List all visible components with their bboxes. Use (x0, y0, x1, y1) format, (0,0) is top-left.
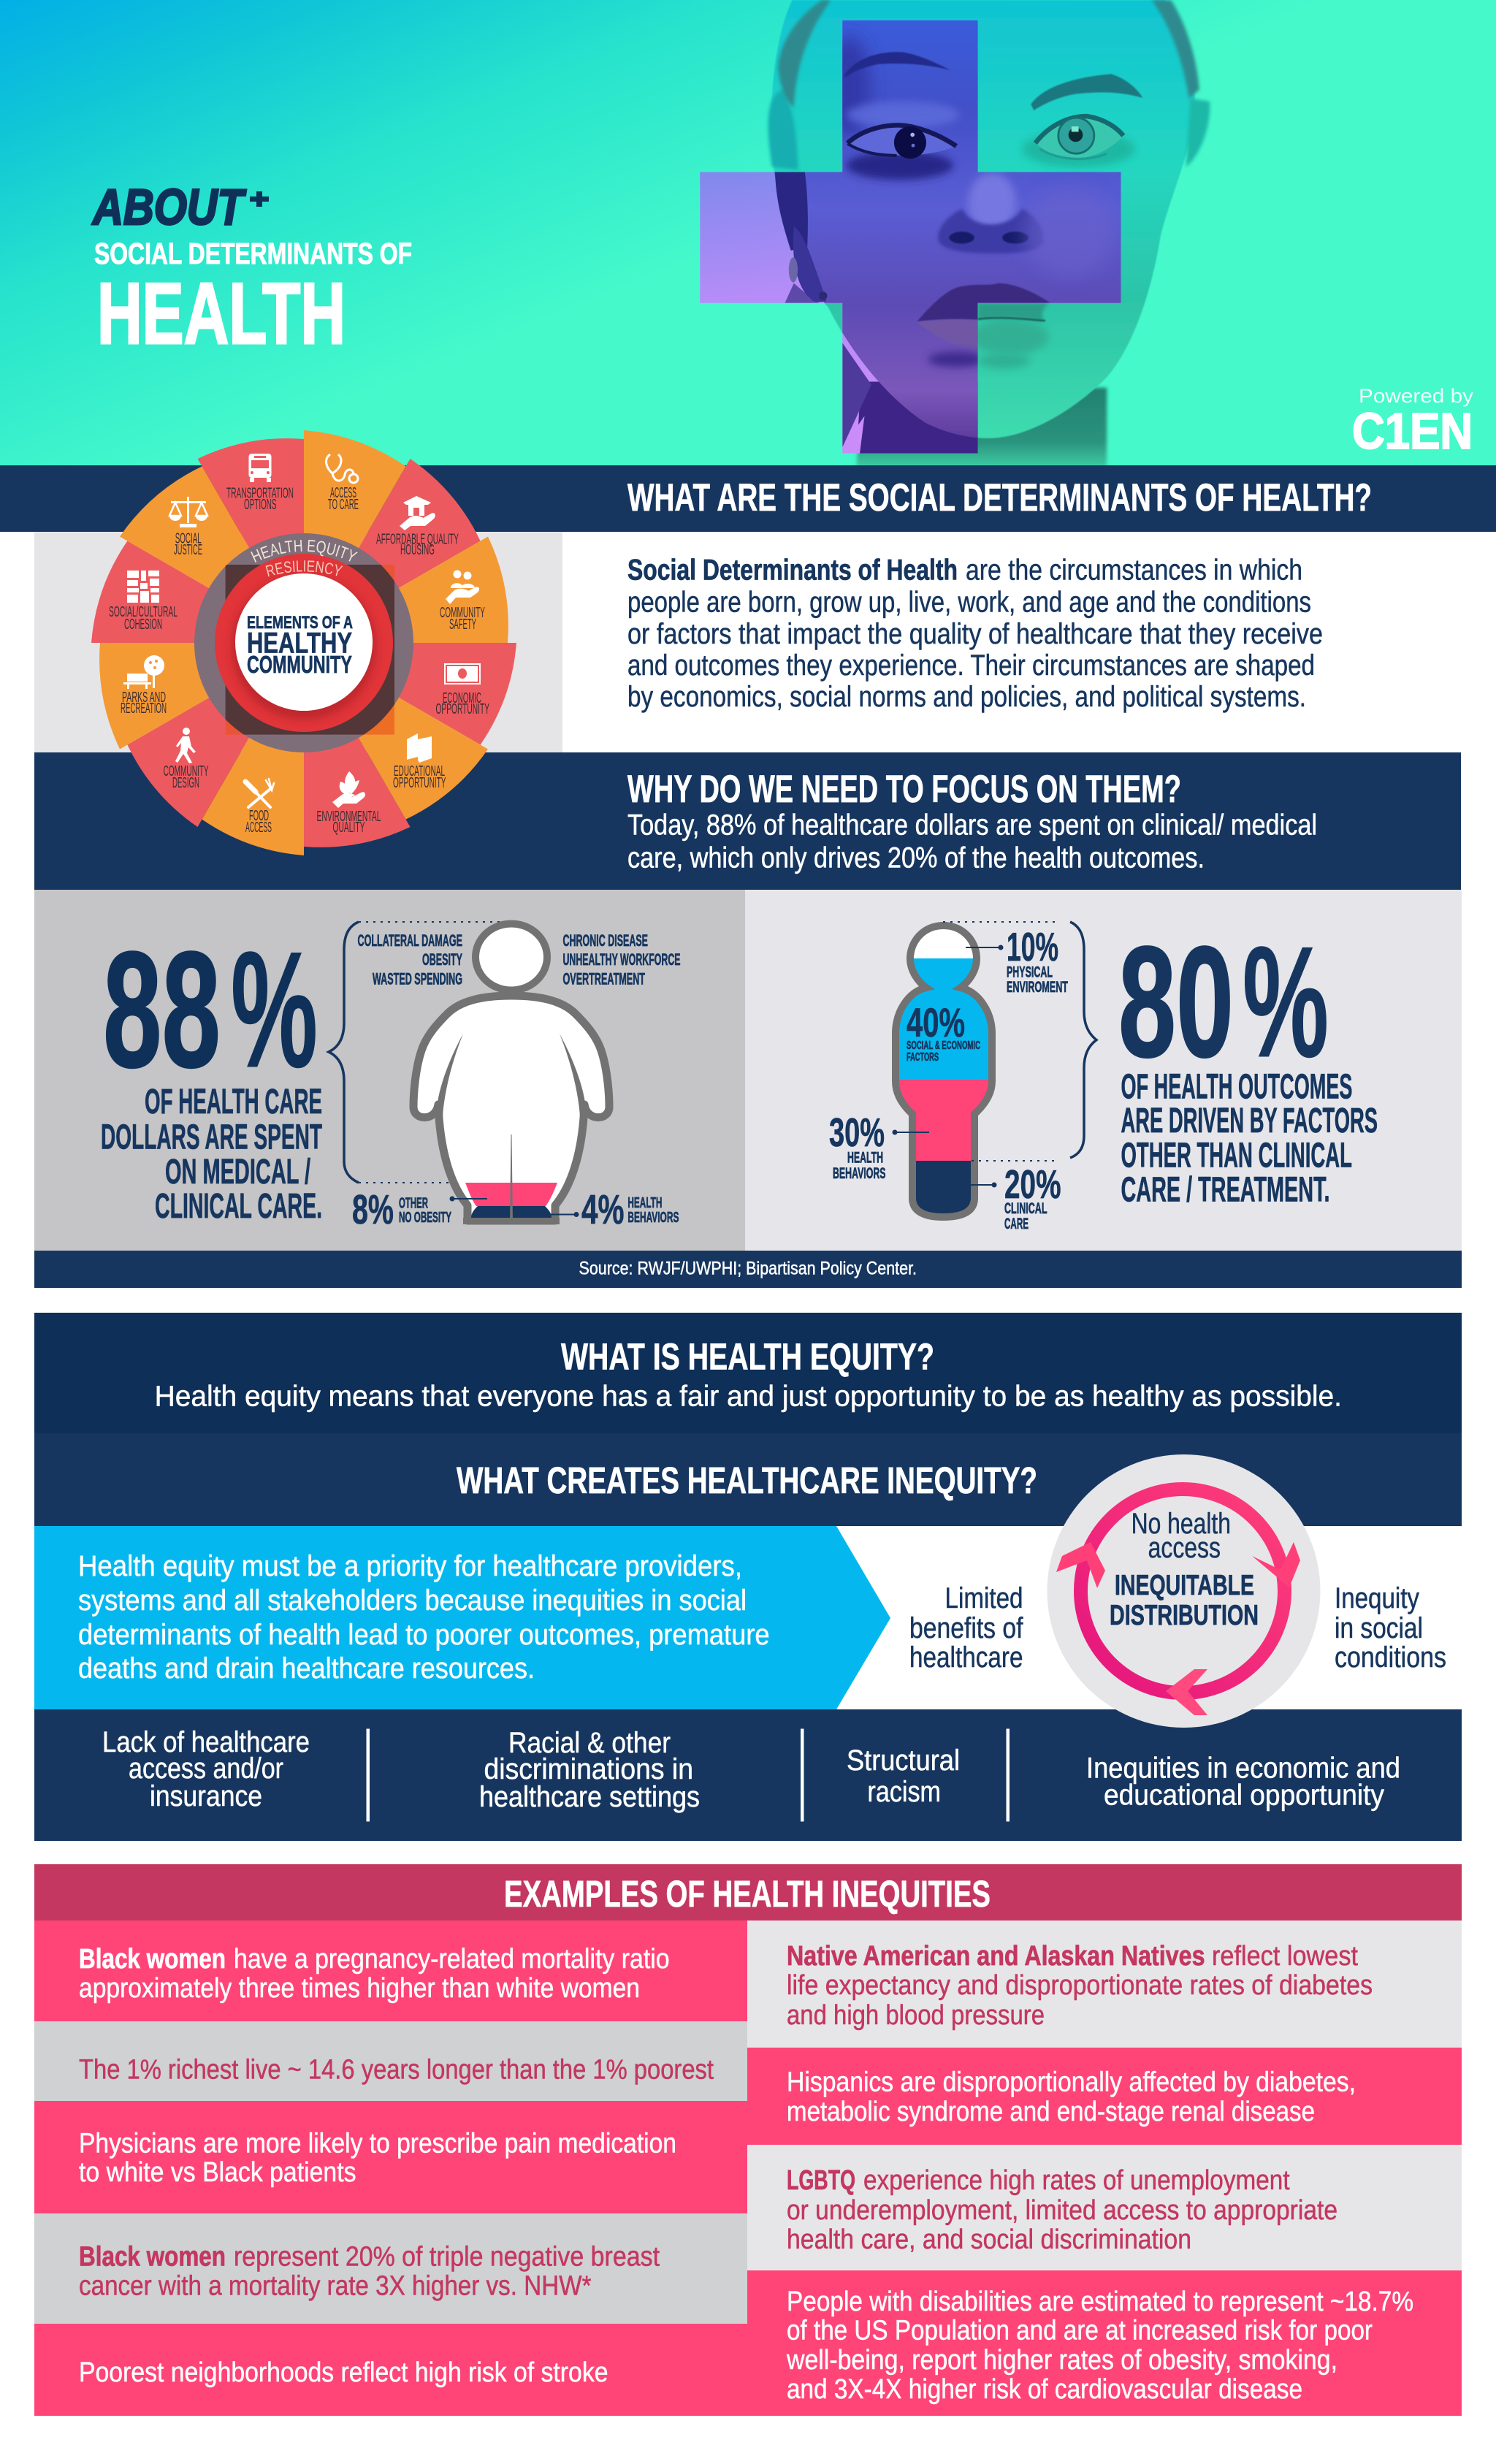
label: educational opportunity (393, 763, 446, 791)
example: hispanics: metabolic syndrome and end-stage renal disease (787, 2097, 1315, 2127)
center square overlay (226, 565, 394, 735)
example: lgbtq: LGBTQ (787, 2165, 855, 2196)
center disc shadow (232, 575, 376, 720)
label: limited benefits (909, 1582, 1023, 1674)
icon: people grid (127, 571, 159, 603)
example: breast cancer (34, 2213, 747, 2324)
stat: 20 percent clinical care: 20% (1004, 1162, 1061, 1207)
labels: costs right (562, 931, 681, 988)
stat: 40 percent social and economic: SOCIAL & ECONOMIC (907, 1040, 980, 1052)
text block: Health equity must be a priority for healthcare providers, (78, 1550, 742, 1582)
cause: discrimination: discriminations in (484, 1753, 693, 1785)
text: inequitable distribution (1110, 1570, 1259, 1631)
cause: structural racism (847, 1744, 960, 1808)
example: pain medication (34, 2101, 747, 2213)
example: lgbtq: or underemployment, limited access to appropriate (787, 2195, 1337, 2226)
label: food access (245, 808, 272, 836)
example: life expectancy (34, 2021, 747, 2101)
label: environmental quality: ENVIRONMENTAL (317, 809, 381, 825)
section band: what are the social determinants (0, 465, 1496, 532)
icon: books (407, 733, 432, 763)
arrow: top right (1252, 1542, 1300, 1587)
example: life expectancy: The 1% richest live ~ 14.6 years longer than the 1% poorest (79, 2054, 714, 2085)
example: pregnancy mortality (34, 1921, 747, 2021)
label: transportation options (226, 485, 294, 513)
text: inequitable distribution: DISTRIBUTION (1110, 1600, 1259, 1631)
label: transportation options: TRANSPORTATION (226, 485, 294, 501)
stat: 10 percent physical environment: PHYSICAL (1007, 964, 1053, 980)
text: no health access: No health (1131, 1508, 1231, 1540)
panel: why focus (34, 752, 1461, 890)
example: hispanics (747, 2048, 1462, 2145)
stat: 80 percent: 80 (1118, 913, 1234, 1090)
text block: 88 percent description (101, 1083, 322, 1226)
text block: definition: people are born, grow up, live, work, and age and the conditions (627, 587, 1311, 619)
stat: 30 percent health behaviors: HEALTH (847, 1149, 883, 1166)
label: social cultural cohesion: SOCIAL/CULTURAL (109, 604, 178, 620)
cause: economic and educational (1086, 1752, 1400, 1812)
stat: 40 percent social and economic (907, 999, 980, 1064)
center text (247, 613, 353, 678)
label: community design: COMMUNITY (164, 763, 209, 779)
example: lgbtq (747, 2145, 1462, 2270)
labels: costs left: COLLATERAL DAMAGE (358, 931, 462, 950)
example: disabilities: of the US Population and are at increased risk for poor (787, 2316, 1373, 2346)
example: stroke (34, 2324, 747, 2416)
ring (1081, 1489, 1284, 1693)
text block (78, 1550, 770, 1685)
label: food access: FOOD (249, 808, 269, 824)
label: affordable quality housing (376, 532, 459, 558)
example: disabilities: and 3X-4X higher risk of cardiovascular disease (787, 2374, 1302, 2405)
example: native americans: life expectancy and disproportionate rates of diabetes (787, 1970, 1373, 2001)
stat: 8 percent other: OTHER (399, 1196, 428, 1212)
cause: discrimination: Racial & other (508, 1727, 671, 1759)
heading: why do we need to focus on them: WHY DO WE NEED TO FOCUS ON THEM? (627, 768, 1181, 811)
label: inequity in social conditions: conditions (1335, 1641, 1446, 1674)
text block: 80 percent description (1121, 1068, 1378, 1210)
example: native americans: and high blood pressure (787, 2000, 1045, 2031)
cause: discrimination: healthcare settings (479, 1781, 700, 1813)
text block: definition: and outcomes they experience. Their circumstances are shaped (627, 649, 1315, 682)
stat: 10 percent physical environment (966, 924, 1068, 996)
stat: 20 percent clinical care: CLINICAL (1004, 1200, 1047, 1217)
center text: COMMUNITY (247, 651, 352, 678)
ring label: health equity: HEALTH EQUITY (251, 540, 358, 562)
title: about: ABOUT (91, 179, 246, 235)
example: disabilities: well-being, report higher rates of obesity, smoking, (786, 2345, 1337, 2376)
heading: WHAT IS HEALTH EQUITY? (561, 1335, 934, 1378)
cause: structural racism: Structural (847, 1744, 960, 1777)
stat: 4 percent health behaviors: HEALTH (627, 1195, 662, 1211)
stat: 80 percent: % (1243, 913, 1329, 1090)
stat: 20 percent clinical care (971, 1162, 1061, 1232)
cause: lack of healthcare: Lack of healthcare (102, 1726, 310, 1758)
title: health: HEALTH (97, 265, 346, 362)
label: environmental quality: QUALITY (333, 820, 365, 836)
center text: ELEMENTS OF A (247, 613, 353, 633)
label: economic opportunity: ECONOMIC (443, 690, 481, 706)
label: educational opportunity: EDUCATIONAL (394, 763, 445, 779)
panel: examples of health inequities (34, 1864, 1462, 2416)
cause: structural racism: racism (868, 1776, 941, 1808)
wheel: elements of a healthy community (91, 430, 516, 855)
labels: costs left: WASTED SPENDING (373, 970, 462, 988)
wheel: elements of a healthy community: TO CARE (328, 497, 359, 513)
subtitle: SOCIAL DETERMINANTS OF (94, 237, 412, 270)
panel: 88 percent (34, 890, 745, 1251)
example: pregnancy mortality: have a pregnancy-related mortality ratio (234, 1944, 670, 1975)
example: native americans: Native American and Alaskan Natives (787, 1941, 1205, 1972)
text: no health access: access (1148, 1532, 1221, 1564)
label: community design (164, 763, 209, 791)
diagram: inequitable distribution cycle (1047, 1454, 1321, 1728)
panel: what creates healthcare inequity (34, 1433, 1462, 1526)
icon: bench and tree (123, 655, 164, 689)
text block: 88 percent description: CLINICAL CARE. (155, 1187, 322, 1226)
stat: 4 percent health behaviors: 4% (581, 1186, 624, 1233)
powered by: Powered by (1359, 385, 1474, 407)
example: breast cancer: Black women (79, 2242, 226, 2273)
label: limited benefits: Limited (945, 1582, 1023, 1614)
text block: definition: by economics, social norms and policies, and political systems. (627, 681, 1306, 713)
stat: 88 percent: 88 (103, 917, 221, 1102)
label: community design: DESIGN (172, 775, 199, 791)
label: limited benefits: healthcare (909, 1641, 1023, 1674)
stat: 30 percent health behaviors (829, 1110, 929, 1182)
ring label: resiliency: RESILIENCY (266, 560, 343, 577)
arrow: bottom (1166, 1669, 1207, 1715)
example: stroke: Poorest neighborhoods reflect high risk of stroke (79, 2357, 608, 2388)
label: parks and recreation (121, 690, 167, 717)
text block: systems and all stakeholders because inequities in social (78, 1584, 747, 1617)
example: breast cancer: cancer with a mortality rate 3X higher vs. NHW* (79, 2270, 592, 2301)
chevron: health equity priority (34, 1526, 890, 1709)
icon: walking person (175, 728, 196, 763)
portrait: teal half of face (768, 0, 1210, 467)
example: native americans (747, 1921, 1462, 2048)
wheel: elements of a healthy community: JUSTICE (174, 542, 202, 558)
text block: definition: are the circumstances in which (966, 554, 1302, 587)
hero banner (0, 0, 1496, 467)
stat: 30 percent health behaviors: 30% (829, 1110, 885, 1155)
label: economic opportunity (435, 690, 489, 717)
brace (329, 922, 359, 1183)
cause: lack of healthcare: insurance (150, 1780, 262, 1812)
example: pain medication: to white vs Black patients (79, 2157, 356, 2188)
stat: 4 percent health behaviors: BEHAVIORS (627, 1210, 679, 1226)
label: social justice (174, 531, 202, 558)
cause: lack of healthcare: access and/or (129, 1752, 283, 1785)
text: no health access (1131, 1508, 1231, 1564)
text block: 80 percent description: CARE / TREATMENT. (1121, 1171, 1329, 1210)
icon: hand with plant (332, 771, 365, 808)
label: social cultural cohesion (109, 604, 178, 633)
example: pregnancy mortality: Black women (79, 1944, 226, 1975)
health equity ring (194, 533, 413, 752)
icon: banknote (445, 664, 480, 684)
label: social justice: SOCIAL (175, 531, 202, 547)
stat: 40 percent social and economic: FACTORS (907, 1051, 939, 1064)
text block: why focus (627, 809, 1317, 874)
panel: 80 percent (745, 890, 1462, 1251)
example: lgbtq: experience high rates of unemployment (863, 2165, 1290, 2196)
stat: 88 percent: % (231, 917, 318, 1102)
label: affordable quality housing: AFFORDABLE QUALITY (376, 532, 459, 548)
definition: Health equity means that everyone has a fair and just opportunity to be as healthy as possible. (155, 1381, 1342, 1413)
source bar (34, 1251, 1462, 1288)
figure: overweight person (413, 923, 609, 1224)
text block: determinants of health lead to poorer outcomes, premature (78, 1619, 770, 1651)
text: inequitable distribution: INEQUITABLE (1115, 1570, 1254, 1601)
label: parks and recreation: PARKS AND (122, 690, 166, 706)
stat: 8 percent other: NO OBESITY (399, 1210, 451, 1226)
stat: 10 percent physical environment: ENVIROMENT (1007, 979, 1068, 996)
text block: definition (627, 554, 1323, 713)
heading: EXAMPLES OF HEALTH INEQUITIES (504, 1873, 991, 1915)
stat: 8 percent other: 8% (352, 1186, 394, 1233)
icon: hand with people (446, 570, 479, 604)
labels: costs right: CHRONIC DISEASE (562, 931, 648, 950)
labels: costs right: OVERTREATMENT (562, 970, 645, 988)
label: transportation options: OPTIONS (244, 497, 276, 513)
label: social cultural cohesion: COHESION (124, 617, 162, 633)
panel: what is health equity (34, 1313, 1462, 1433)
wheel: elements of a healthy community: ACCESS (245, 820, 272, 836)
label: environmental quality (317, 809, 381, 836)
label: access to care (328, 485, 359, 513)
text block: 88 percent description: DOLLARS ARE SPENT (101, 1118, 322, 1157)
heading: WHAT CREATES HEALTHCARE INEQUITY? (457, 1460, 1037, 1501)
label: inequity in social conditions (1335, 1582, 1446, 1674)
stat: 20 percent clinical care: CARE (1004, 1216, 1028, 1232)
icon: scales of justice (169, 497, 207, 527)
example: disabilities: People with disabilities are estimated to represent ~18.7% (787, 2286, 1413, 2317)
wheel segments (69, 408, 539, 878)
brace (1070, 922, 1096, 1158)
center text: HEALTHY (247, 627, 352, 659)
wheel: elements of a healthy community: RECREATION (121, 701, 167, 717)
stat: 8 percent other (352, 1186, 487, 1233)
text block: deaths and drain healthcare resources. (78, 1652, 535, 1685)
logo: powered by C1EN (1352, 385, 1474, 459)
text block: why focus: care, which only drives 20% of the health outcomes. (627, 842, 1205, 874)
plus mark (250, 191, 269, 207)
label: community safety (440, 605, 485, 633)
cause: lack of healthcare (102, 1726, 310, 1812)
text block: 88 percent description: ON MEDICAL / (165, 1153, 310, 1191)
stat: 4 percent health behaviors (541, 1186, 679, 1233)
example: hispanics: Hispanics are disproportionally affected by diabetes, (787, 2067, 1356, 2098)
figure: thin person (892, 922, 996, 1221)
icon: fork and knife (245, 779, 274, 807)
labels: costs right: UNHEALTHY WORKFORCE (562, 950, 681, 969)
text block: definition: Social Determinants of Health (627, 554, 958, 587)
ring square shading (226, 565, 394, 735)
label: community safety: SAFETY (449, 617, 476, 633)
portrait: purple cross half of face (700, 20, 1121, 453)
stat: 30 percent health behaviors: BEHAVIORS (833, 1165, 885, 1182)
resiliency ring (215, 554, 393, 732)
source text: Source: RWJF/UWPHI; Bipartisan Policy Center. (579, 1259, 917, 1279)
icon: hand with house (400, 496, 435, 530)
label: community safety: COMMUNITY (440, 605, 485, 621)
panel: causes row (34, 1709, 1462, 1841)
center disc (235, 573, 373, 711)
example: lgbtq: health care, and social discrimination (787, 2224, 1191, 2255)
icon: stethoscope (327, 454, 358, 483)
text block: why focus: Today, 88% of healthcare dollars are spent on clinical/ medical (627, 809, 1317, 841)
panel: wheel background (34, 532, 562, 752)
cause: economic and educational: educational opportunity (1104, 1780, 1384, 1812)
label: affordable quality housing: HOUSING (400, 542, 435, 558)
example: breast cancer: represent 20% of triple negative breast (234, 2242, 660, 2273)
label: inequity in social conditions: Inequity (1335, 1582, 1419, 1614)
icon: bus (248, 454, 272, 482)
example: pain medication: Physicians are more likely to prescribe pain medication (79, 2129, 676, 2159)
cause: economic and educational: Inequities in economic and (1086, 1752, 1400, 1784)
label: economic opportunity: OPPORTUNITY (435, 701, 489, 717)
arrow: left (1056, 1542, 1105, 1588)
text block: 88 percent description: OF HEALTH CARE (145, 1083, 322, 1121)
C1EN: C1EN (1352, 403, 1473, 459)
label: inequity in social conditions: in social (1335, 1612, 1423, 1644)
stat: 40 percent social and economic: 40% (907, 999, 965, 1045)
text block: definition: or factors that impact the quality of healthcare that they receive (627, 618, 1323, 650)
wheel: elements of a healthy community: ACCESS (330, 485, 356, 501)
title: about social determinants of health (91, 179, 412, 362)
label: educational opportunity: OPPORTUNITY (393, 775, 446, 791)
labels: costs left: OBESITY (422, 950, 462, 969)
example: disabilities (747, 2270, 1462, 2416)
label: limited benefits: benefits of (909, 1612, 1023, 1644)
cause: discrimination (479, 1727, 700, 1813)
example: native americans: reflect lowest (1212, 1941, 1358, 1972)
stat: 10 percent physical environment: 10% (1007, 924, 1058, 969)
example: pregnancy mortality: approximately three times higher than white women (79, 1973, 640, 2004)
labels: costs left (358, 931, 462, 988)
